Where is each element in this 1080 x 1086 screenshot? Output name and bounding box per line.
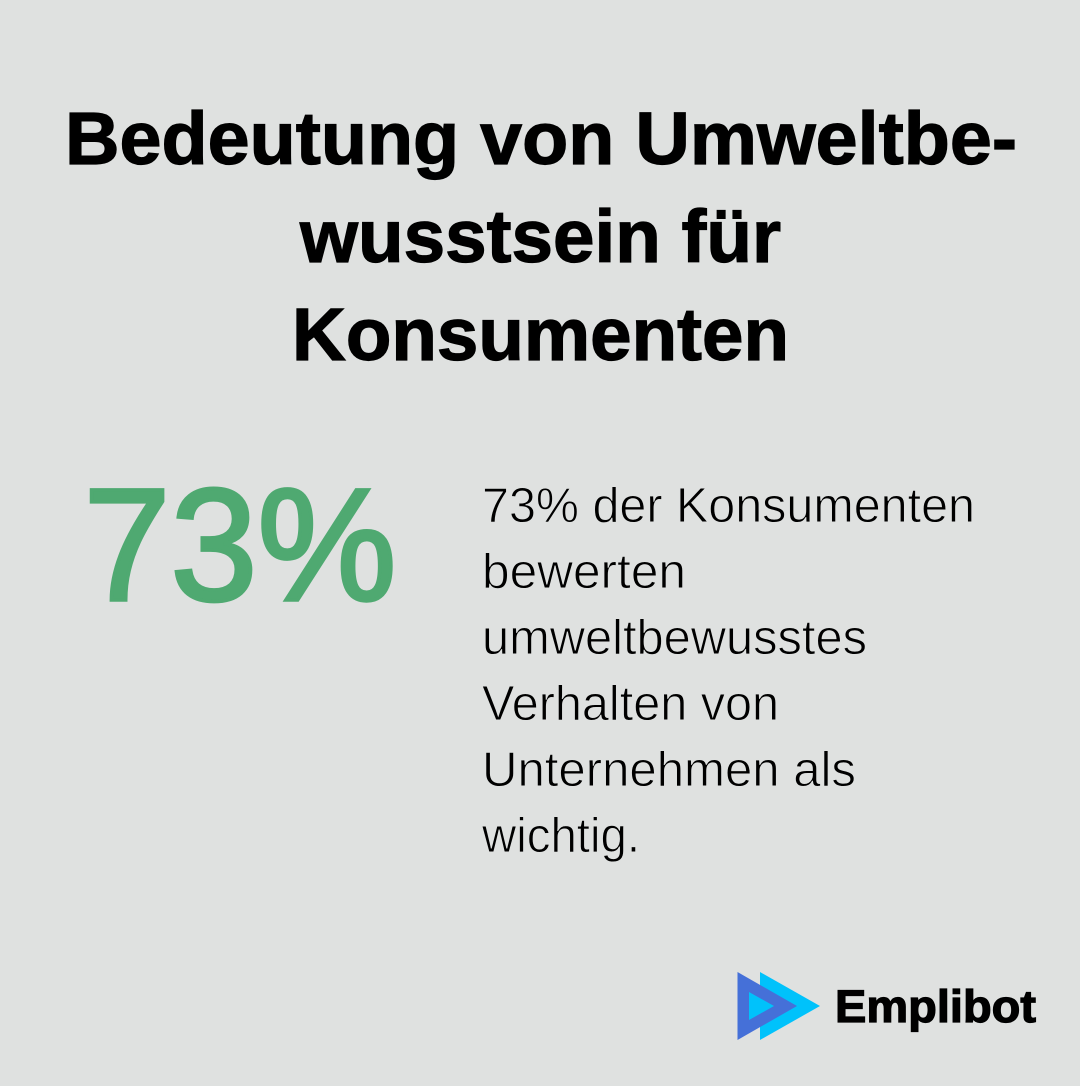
title: wusstsein für <box>299 195 781 278</box>
statistic description: Unternehmen als <box>482 743 856 797</box>
big statistic: 73%: 73% <box>84 455 396 634</box>
title: Bedeutung von Umweltbe- <box>65 97 1017 180</box>
logo: Emplibot <box>738 972 1036 1040</box>
wordmark: Emplibot <box>835 981 1036 1032</box>
statistic description: umweltbewusstes <box>482 611 867 665</box>
statistic description: wichtig. <box>481 809 640 863</box>
statistic description <box>481 479 975 863</box>
statistic description: bewerten <box>482 545 686 599</box>
statistic description: 73% der Konsumenten <box>482 479 975 533</box>
icon: play triangles <box>738 972 820 1040</box>
title <box>65 97 1017 376</box>
statistic description: Verhalten von <box>482 677 779 731</box>
title: Konsumenten <box>292 293 789 376</box>
